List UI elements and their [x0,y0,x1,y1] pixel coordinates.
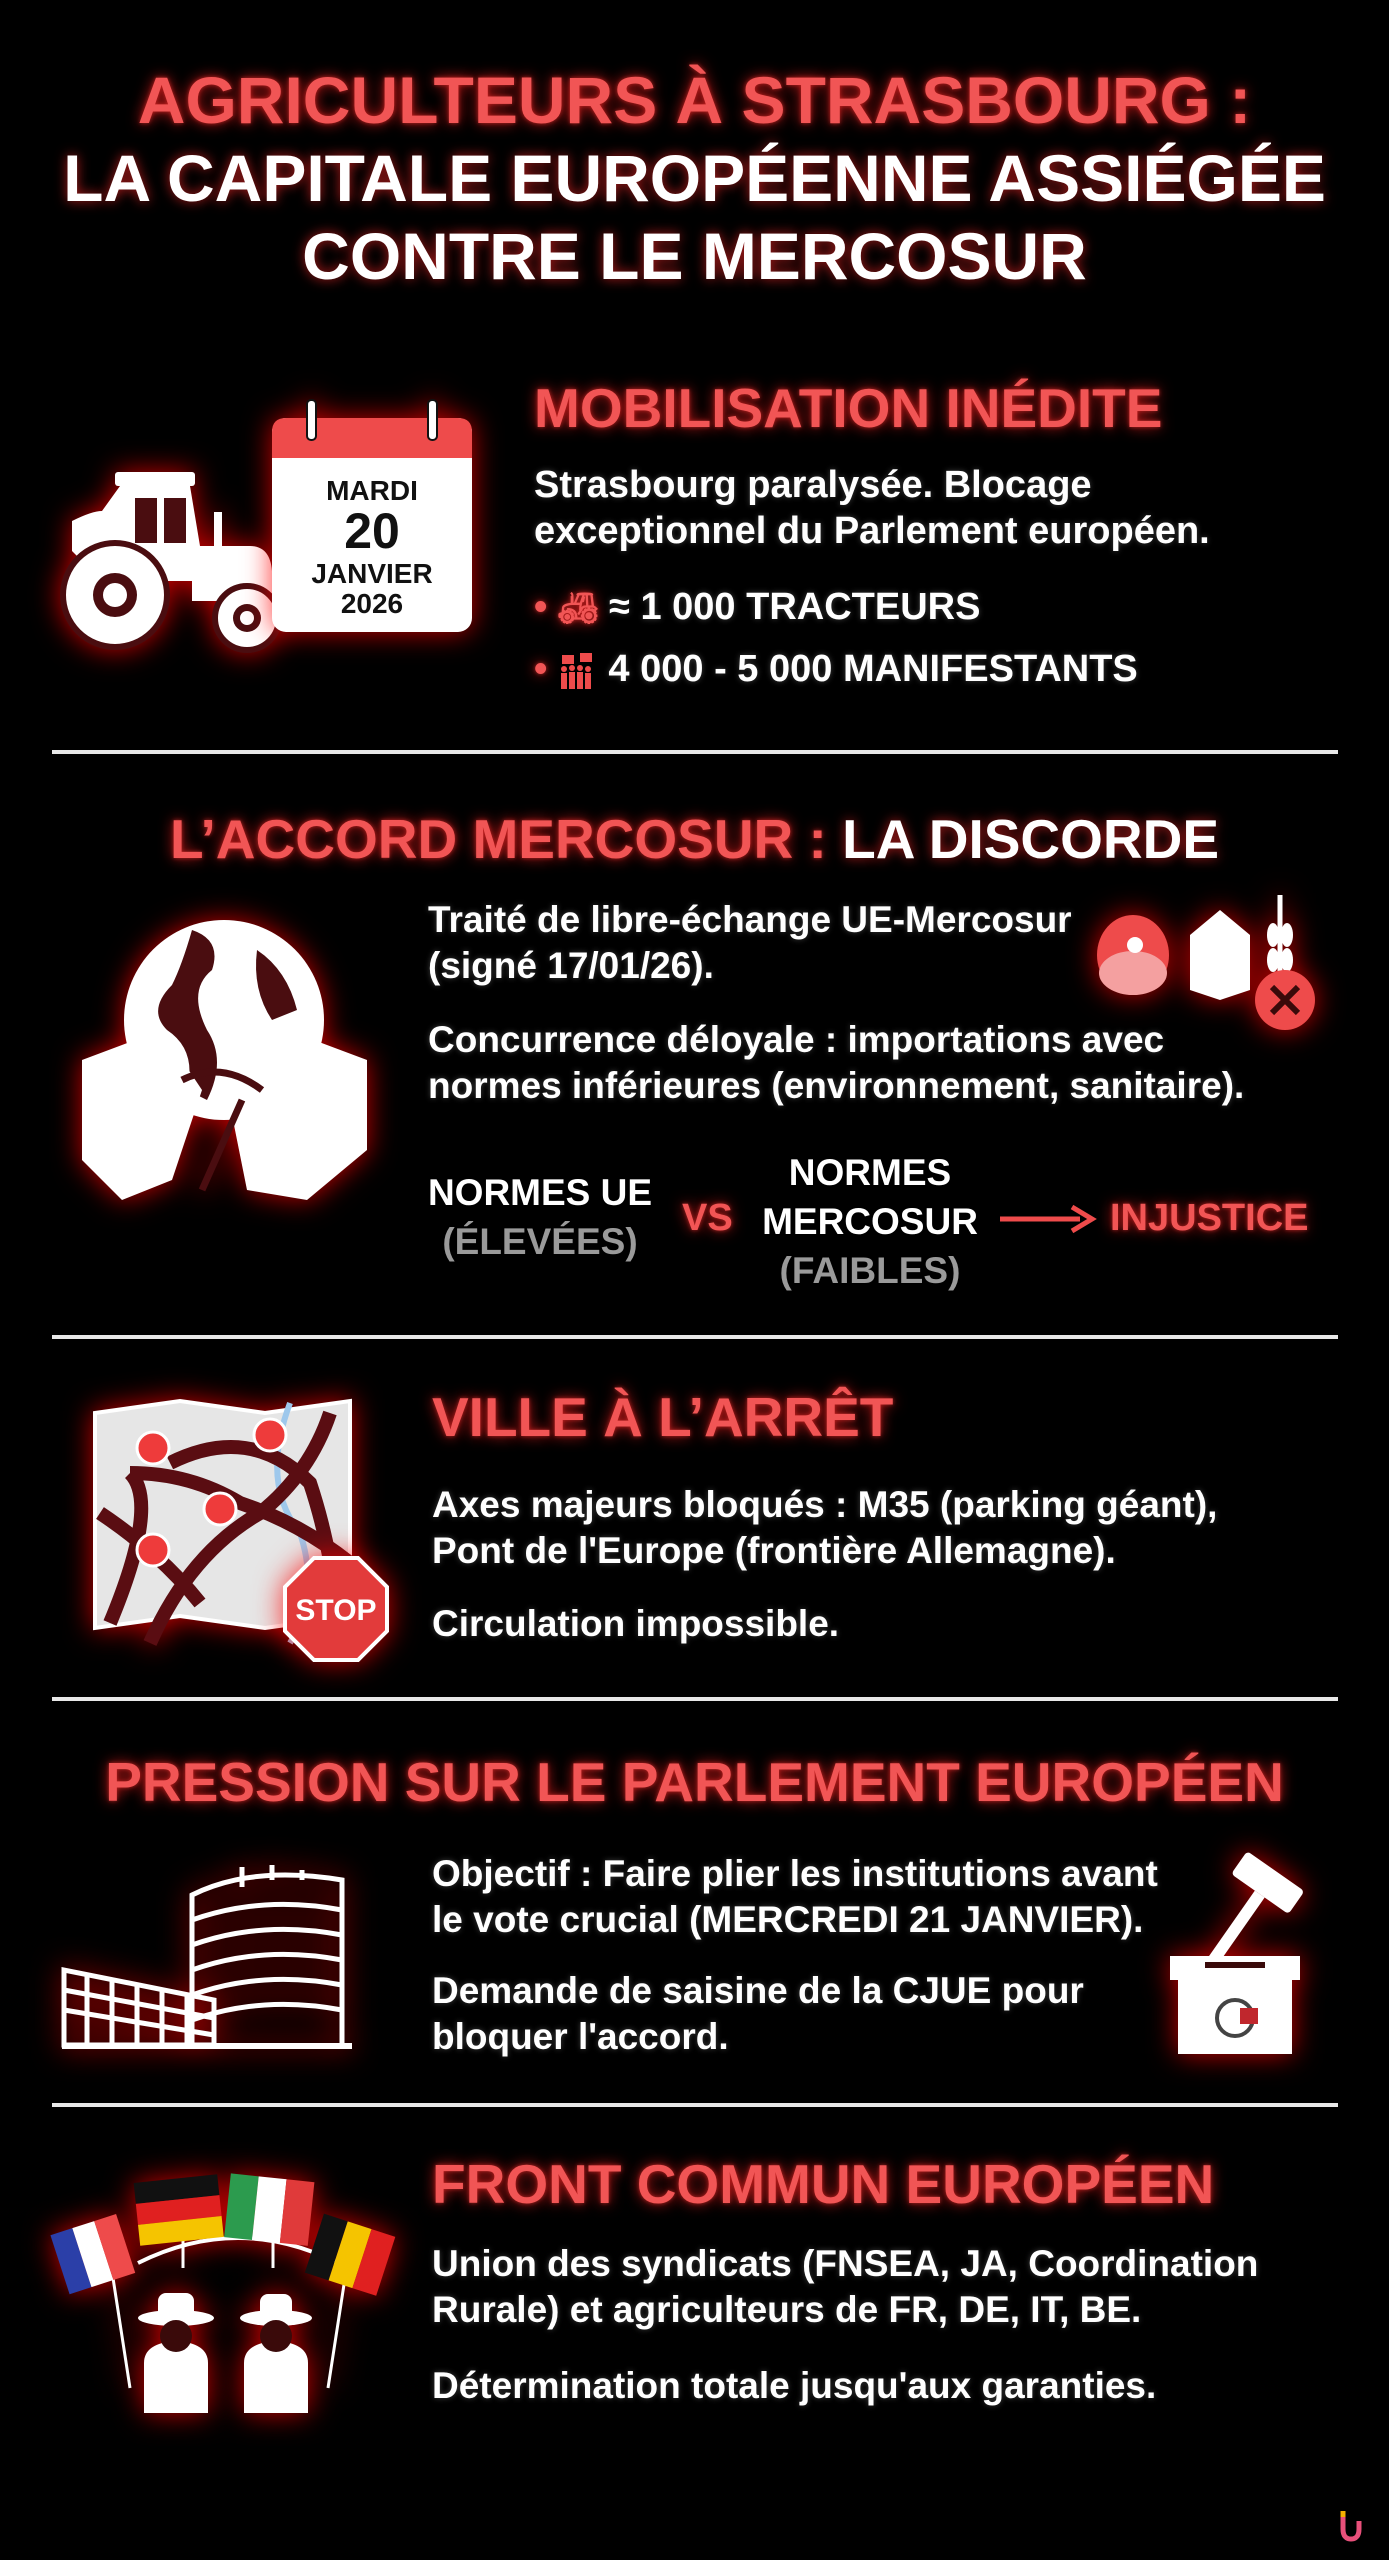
heading: ville: VILLE À L’ARRÊT [432,1386,893,1448]
icon: calendar: MARDI [326,475,418,506]
text: Détermination totale jusqu'aux garanties. [432,2365,1156,2406]
icon: flags and farmers [33,2153,413,2436]
logo [1340,2511,1362,2542]
heading: pression: PRESSION SUR LE PARLEMENT EUROPÉEN [105,1751,1284,1813]
icon: globe handshake [59,898,390,1220]
icon: tractor [38,449,298,674]
arrow [1000,1204,1097,1234]
text: Circulation impossible. [432,1603,839,1644]
comparison: normes [428,1152,1314,1291]
bullet: protesters: • 4 000 - 5 000 MANIFESTANTS [534,648,1138,690]
text: ville: Pont de l'Europe (frontière Allemagne). [432,1530,1116,1571]
bullet: tractors: • 🚜︎ ≈ 1 000 TRACTEURS [534,586,980,628]
title: AGRICULTEURS À STRASBOURG : [138,63,1251,137]
comparison: normes: INJUSTICE [1110,1197,1308,1239]
comparison: normes: (FAIBLES) [780,1250,960,1291]
text: front commun: Union des syndicats (FNSEA, JA, Coordination [432,2243,1258,2284]
icon: calendar: 2026 [341,588,403,619]
comparison: normes: VS [682,1197,733,1239]
comparison: normes: (ÉLEVÉES) [442,1221,638,1262]
text: traite: Traité de libre-échange UE-Mercosur [428,899,1072,940]
text: Demande de saisine de la CJUE pour [432,1970,1084,2011]
icon: stop sign [260,1533,412,1685]
text: pression: Objectif : Faire plier les institutions avant [432,1853,1158,1894]
text: mobilisation: exceptionnel du Parlement européen. [534,510,1210,552]
text: concurrence [426,1019,1244,1108]
text: mobilisation: Strasbourg paralysée. Blocage [534,464,1092,506]
icon: calendar: 20 [344,503,400,559]
title: LA CAPITALE EUROPÉENNE ASSIÉGÉE [63,141,1326,215]
icon: calendar: JANVIER [311,558,433,589]
icon: calendar [249,384,495,655]
icon: food imports crossed [1076,888,1336,1051]
text: traite: (signé 17/01/26). [428,945,714,986]
text: concurrence: normes inférieures (environnement, sanitaire). [428,1065,1244,1106]
icon: gavel and ballot box [1149,1836,1321,2077]
text: bloquer l'accord. [432,2016,729,2057]
title: CONTRE LE MERCOSUR [302,219,1087,293]
text: ville: Axes majeurs bloqués : M35 (parking géant), [432,1484,1217,1525]
comparison: normes: NORMES UE [428,1172,652,1213]
text: pression [430,1853,1159,1942]
icon: parliament building [40,1850,367,2071]
icon: stop sign: STOP [295,1594,377,1627]
text: concurrence: Concurrence déloyale : importations avec [428,1019,1164,1060]
text: traite [426,899,1073,988]
text: ville [432,1484,1218,1574]
comparison: normes: NORMES [789,1152,951,1193]
heading: accord mercosur: L’ACCORD MERCOSUR : LA DISCORDE [170,808,1219,870]
text: pression: le vote crucial (MERCREDI 21 JANVIER). [432,1899,1143,1940]
text: mobilisation [532,464,1210,554]
comparison: normes: MERCOSUR [762,1201,978,1242]
heading: front commun: FRONT COMMUN EUROPÉEN [432,2153,1214,2215]
text: front commun [431,2243,1259,2332]
title [58,56,1331,293]
text: front commun: Rurale) et agriculteurs de FR, DE, IT, BE. [432,2289,1141,2330]
heading: mobilisation: MOBILISATION INÉDITE [534,377,1162,439]
icon: blocked map [70,1378,375,1660]
